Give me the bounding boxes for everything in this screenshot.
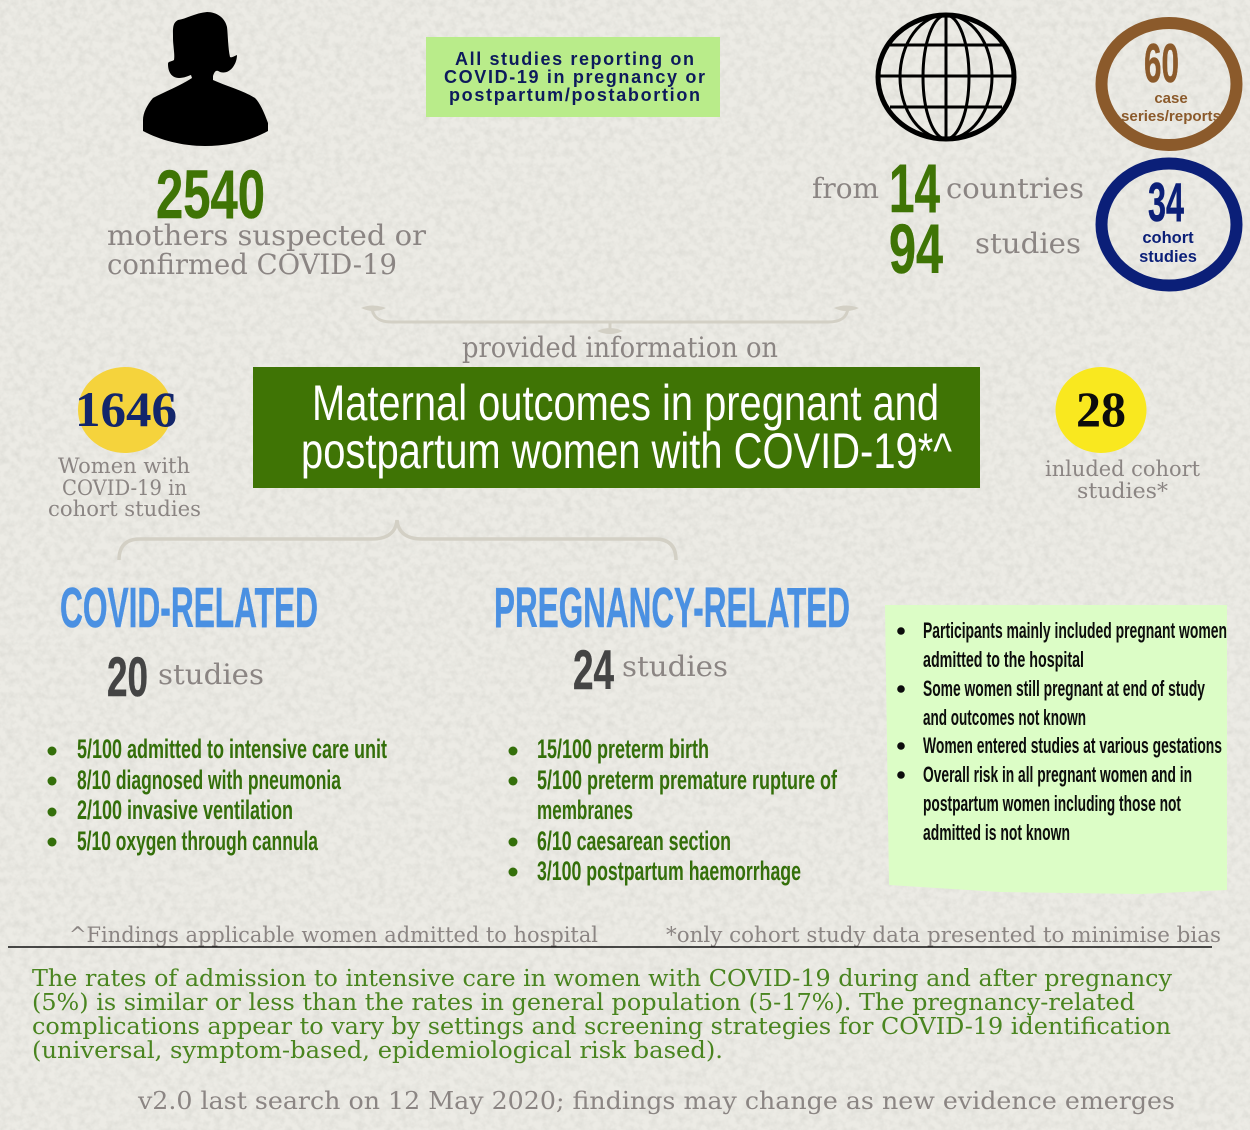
panel: caveats note: admitted is not known: [923, 820, 1070, 845]
stat: 20 studies: studies: [158, 658, 264, 691]
stat: 2540 mothers: mothers suspected or: [107, 219, 427, 252]
panel: pregnancy-related: [494, 576, 850, 886]
stat: 24 studies: studies: [622, 650, 728, 683]
text: summary paragraph: (universal, symptom-based, epidemiological risk based).: [32, 1038, 723, 1064]
list: covid outcomes: 5/10 oxygen through cannula: [77, 826, 319, 856]
stat: 20 studies: 20: [107, 645, 148, 708]
callout: all studies: All studies reporting on: [455, 49, 694, 69]
list: covid outcomes: 5/100 admitted to intensive care unit: [77, 734, 387, 764]
text: summary paragraph: [32, 966, 1172, 1064]
ring: 34 cohort studies: studies: [1139, 248, 1197, 266]
panel: caveats note: [885, 605, 1227, 894]
ring: 34 cohort studies: 34: [1148, 171, 1184, 233]
stat: 28 included cohort studies: inluded cohort: [1045, 457, 1201, 481]
panel: caveats note: admitted to the hospital: [923, 647, 1084, 672]
heading: covid-related: COVID-RELATED: [60, 576, 318, 640]
list: pregnancy outcomes: 15/100 preterm birth: [537, 734, 709, 764]
list: covid outcomes: 2/100 invasive ventilation: [77, 795, 293, 825]
ring: 60 case series: [1102, 23, 1236, 145]
list: pregnancy outcomes: membranes: [537, 795, 633, 825]
stat: 1646 women: Women with: [58, 454, 190, 478]
text: provided information on: provided information on: [462, 331, 778, 364]
text: summary paragraph: (5%) is similar or less than the rates in general population (5-17%). The pregnancy-related: [32, 990, 1135, 1016]
text: summary paragraph: complications appear to vary by settings and screening strategies for COVID-19 identification: [32, 1014, 1171, 1040]
ring: 60 case series: series/reports: [1121, 108, 1221, 125]
title banner: Maternal outcomes in pregnant and: [312, 375, 939, 431]
footnotes: ^Findings applicable women admitted to hospital: [69, 923, 598, 947]
stat: 2540 mothers: 2540: [156, 156, 265, 233]
list: pregnancy outcomes: 5/100 preterm premature rupture of: [537, 765, 838, 795]
list: pregnancy outcomes: 3/100 postpartum haemorrhage: [537, 856, 801, 886]
stat: 28 included cohort studies: 28: [1076, 381, 1126, 437]
stat: 24 studies: 24: [573, 638, 614, 701]
stat: 2540 mothers: confirmed COVID-19: [107, 248, 397, 281]
stat: 1646 women: [48, 367, 201, 521]
callout: all studies: COVID-19 in pregnancy or: [444, 67, 705, 87]
list: pregnancy outcomes: 6/10 caesarean section: [537, 826, 731, 856]
stat: 14 countries, 94 studies: [812, 150, 1084, 288]
text: version note: v2.0 last search on 12 May 2020; findings may change as new evidence emerges: [137, 1087, 1175, 1115]
stat: 14 countries, 94 studies: countries: [946, 172, 1084, 205]
stat: 20 studies: [107, 645, 264, 708]
stat: 24 studies: [573, 638, 728, 701]
callout: all studies: postpartum/postabortion: [449, 85, 700, 105]
text: summary paragraph: The rates of admission to intensive care in women with COVID-19 during and after pregnancy: [32, 966, 1172, 992]
list: covid outcomes: 8/10 diagnosed with pneumonia: [77, 765, 342, 795]
stat: 14 countries, 94 studies: 14: [889, 150, 940, 227]
stat: 1646 women: COVID-19 in: [62, 476, 187, 500]
list: covid outcomes: [48, 734, 387, 856]
icon: globe: [878, 15, 1014, 139]
stat: 14 countries, 94 studies: from: [812, 172, 879, 205]
ring: 60 case series: 60: [1144, 32, 1179, 94]
title banner: postpartum women with COVID-19*^: [301, 423, 952, 479]
title banner: [253, 367, 980, 488]
stat: 28 included cohort studies: studies*: [1077, 479, 1169, 503]
callout: all studies: [426, 37, 720, 117]
icon: woman silhouette: [143, 12, 268, 146]
footnotes: [69, 923, 1221, 947]
heading: pregnancy-related: PREGNANCY-RELATED: [494, 576, 850, 640]
list: pregnancy outcomes: [508, 734, 838, 886]
stat: 28 included cohort studies: [1045, 367, 1201, 503]
stat: 1646 women: 1646: [75, 381, 177, 437]
panel: caveats note: and outcomes not known: [923, 705, 1086, 730]
panel: covid-related: [48, 576, 387, 856]
stat: 14 countries, 94 studies: 94: [889, 210, 943, 288]
stat: 2540 mothers: [107, 156, 427, 281]
arrow: upper bracket: [361, 306, 859, 334]
stat: 1646 women: cohort studies: [48, 497, 201, 521]
stat: 14 countries, 94 studies: studies: [975, 227, 1081, 260]
ring: 34 cohort studies: [1102, 164, 1236, 286]
arrow: lower bracket: [119, 520, 676, 560]
ring: 34 cohort studies: cohort: [1142, 229, 1194, 247]
footnotes: *only cohort study data presented to minimise bias: [666, 923, 1221, 947]
ring: 60 case series: case: [1154, 90, 1188, 107]
